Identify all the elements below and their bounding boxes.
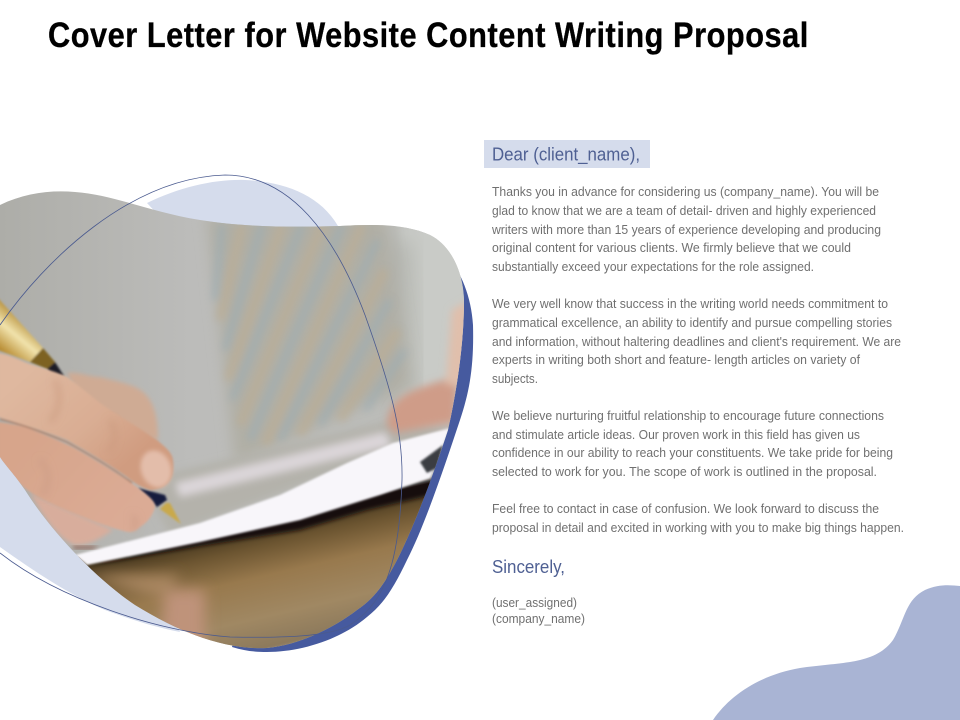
blurred page and desk surface: [154, 424, 434, 530]
title: Cover Letter for Website Content Writing Proposal: [48, 15, 808, 54]
paragraph 1: glad to know that we are a team of detail- driven and highly experienced: [492, 204, 876, 218]
paragraph 1: Thanks you in advance for considering us (company_name). You will be: [492, 185, 879, 199]
paragraph 2: grammatical excellence, an ability to identify and pursue compelling stories: [492, 316, 892, 330]
paragraph 4: Feel free to contact in case of confusion. We look forward to discuss the: [492, 502, 879, 516]
paragraph 3: selected to work for you. The scope of work is outlined in the proposal.: [492, 465, 877, 479]
photo: hand writing on paper: [0, 180, 480, 660]
table: [78, 482, 430, 648]
paragraph 3: and stimulate article ideas. Our proven work in this field has given us: [492, 428, 860, 442]
right hand: [387, 300, 470, 433]
paragraph 1: writers with more than 15 years of experience developing and producing: [491, 223, 881, 237]
signature details: (company_name): [492, 612, 585, 626]
signature details: (user_assigned): [492, 596, 577, 610]
table reflection: [85, 575, 205, 650]
paragraph 4: [492, 502, 904, 535]
paragraph 2: [492, 297, 901, 386]
pen: [0, 298, 181, 524]
paragraph 4: proposal in detail and excited in working with you to make big things happen.: [492, 521, 904, 535]
paragraph 2: and information, without haltering deadlines and client's requirement. We are: [492, 335, 901, 349]
light blue background blob: [0, 180, 338, 632]
dark blue accent blob: [232, 232, 473, 652]
sign-off: Sincerely,: [492, 556, 565, 577]
paragraph 3: confidence in our ability to reach your constituents. We take pride for being: [492, 446, 893, 460]
paragraph 2: experts in writing both short and feature- length articles on variety of: [492, 353, 861, 367]
photo background: shirt and tie: [207, 215, 470, 465]
thin outline curve: [0, 175, 402, 637]
bottom-right decorative blob: [713, 585, 960, 720]
greeting box: Dear (client_name),: [492, 144, 640, 166]
paragraph 1: substantially exceed your expectations for the role assigned.: [492, 260, 814, 274]
greeting box: [484, 140, 650, 168]
paragraph 3: [492, 409, 893, 479]
paragraph 1: original content for various clients. We firmly believe that we could: [492, 241, 851, 255]
signature details: [492, 596, 585, 626]
paragraph 1: [491, 185, 881, 274]
paragraph 3: We believe nurturing fruitful relationship to encourage future connections: [492, 409, 884, 423]
left writing hand: [0, 353, 177, 549]
paragraph 2: We very well know that success in the writing world needs commitment to: [492, 297, 888, 311]
paragraph 2: subjects.: [492, 372, 538, 386]
paper with shadow: [75, 428, 450, 566]
